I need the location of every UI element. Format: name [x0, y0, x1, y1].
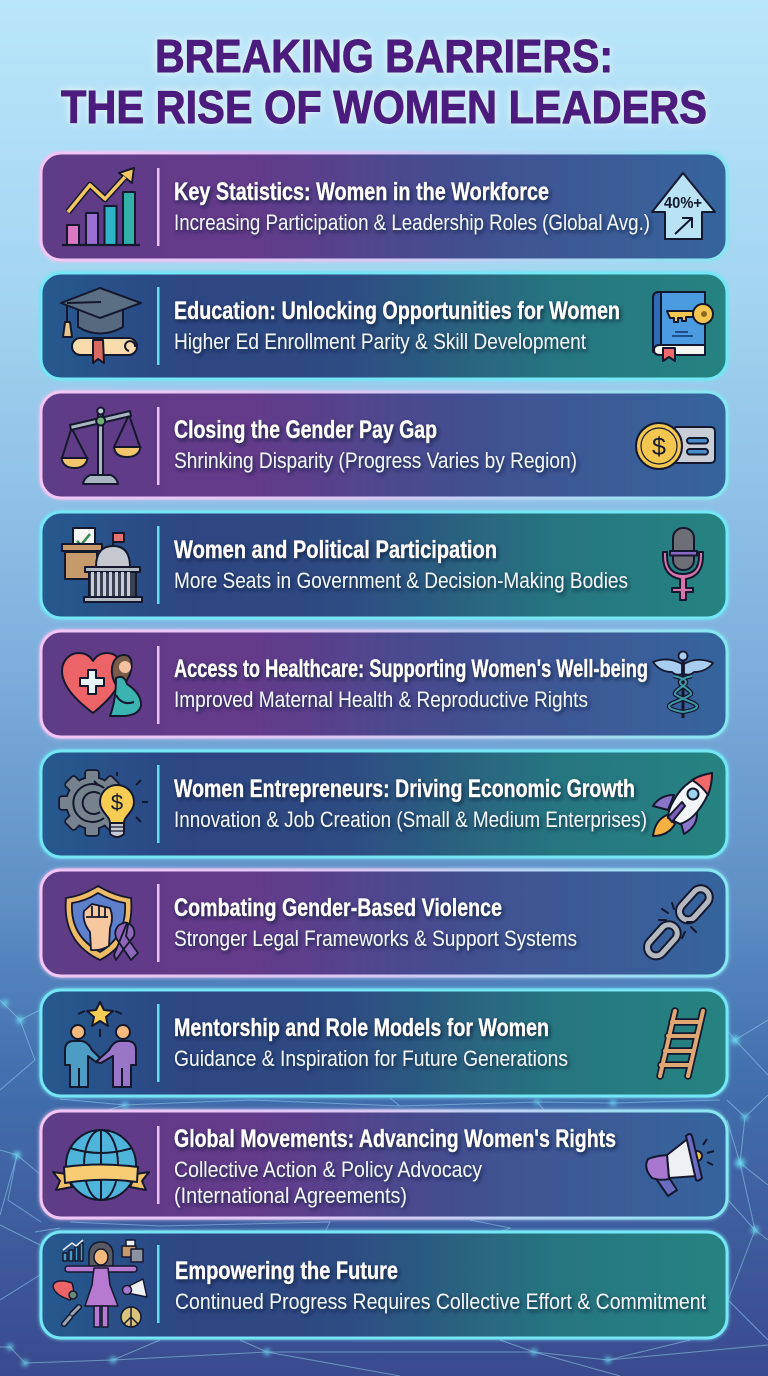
- panel: empowering the future: [41, 1232, 727, 1338]
- icon: heart and pregnant woman: [62, 653, 141, 716]
- heading: Women Entrepreneurs: Driving Economic Growth: [174, 775, 635, 803]
- panel: gender pay gap: [41, 392, 727, 498]
- icon: megaphone: [646, 1134, 714, 1196]
- icon: rocket: [653, 773, 712, 836]
- icon: coin and banknote: [636, 423, 715, 469]
- subheading line 2: (International Agreements): [174, 1183, 407, 1208]
- heading: Mentorship and Role Models for Women: [174, 1014, 549, 1042]
- heading: Key Statistics: Women in the Workforce: [174, 178, 549, 206]
- icon: coin and banknote: $: [652, 433, 666, 461]
- subheading: Guidance & Inspiration for Future Generations: [174, 1046, 568, 1071]
- panel: entrepreneurs: [41, 751, 727, 857]
- panel: global movements: [41, 1111, 727, 1218]
- heading: Women and Political Participation: [174, 536, 497, 564]
- icon: up arrow 40 percent: [652, 173, 715, 239]
- icon: two people and star: [65, 1002, 136, 1087]
- panel: education: [41, 273, 727, 379]
- heading: Education: Unlocking Opportunities for Women: [174, 297, 620, 325]
- icon: up arrow 40 percent: 40%+: [664, 195, 702, 212]
- icon: ballot box and capitol: [62, 528, 142, 602]
- icon: ladder: [660, 1011, 703, 1076]
- icon: broken chain: [644, 885, 713, 959]
- subheading: Shrinking Disparity (Progress Varies by Region): [174, 448, 577, 473]
- panel: healthcare: [41, 631, 727, 737]
- icon: caduceus: [653, 652, 713, 718]
- subheading: Improved Maternal Health & Reproductive Rights: [174, 687, 588, 712]
- subheading: Stronger Legal Frameworks & Support Systems: [174, 926, 577, 951]
- icon: balance scales: [62, 408, 140, 484]
- subheading: Increasing Participation & Leadership Roles (Global Avg.): [174, 210, 650, 235]
- icon: gear and lightbulb: $: [111, 790, 123, 815]
- icon: graduation cap and diploma: [61, 288, 141, 363]
- panel: gender-based violence: [41, 870, 727, 976]
- title line 2: THE RISE OF WOMEN LEADERS: [61, 81, 707, 133]
- background network pattern: [0, 1000, 768, 1376]
- icon: book and key: [653, 292, 713, 361]
- heading: Combating Gender-Based Violence: [174, 894, 502, 922]
- subheading: More Seats in Government & Decision-Making Bodies: [174, 568, 628, 593]
- heading: Empowering the Future: [175, 1257, 398, 1285]
- background glow nodes: [2, 1000, 758, 1366]
- panel: key statistics: [41, 153, 727, 260]
- subheading line 1: Collective Action & Policy Advocacy: [174, 1157, 482, 1182]
- subheading: Higher Ed Enrollment Parity & Skill Development: [174, 329, 586, 354]
- panel: mentorship: [41, 990, 727, 1096]
- icon: globe with banner: [53, 1130, 149, 1200]
- title: [61, 30, 707, 133]
- icon: woman surrounded by small icons: [53, 1240, 147, 1327]
- subheading: Continued Progress Requires Collective Effort & Commitment: [175, 1289, 706, 1314]
- panel: political participation: [41, 512, 727, 618]
- title line 1: BREAKING BARRIERS:: [155, 30, 613, 82]
- icon: rising bar chart: [62, 168, 140, 245]
- icon: shield with fist and ribbon: [66, 886, 138, 960]
- heading: Global Movements: Advancing Women's Rights: [174, 1125, 616, 1153]
- icon: microphone with female symbol: [663, 528, 703, 600]
- subheading: Innovation & Job Creation (Small & Medium Enterprises): [174, 807, 647, 832]
- icon: gear and lightbulb: [60, 771, 148, 837]
- heading: Closing the Gender Pay Gap: [174, 416, 437, 444]
